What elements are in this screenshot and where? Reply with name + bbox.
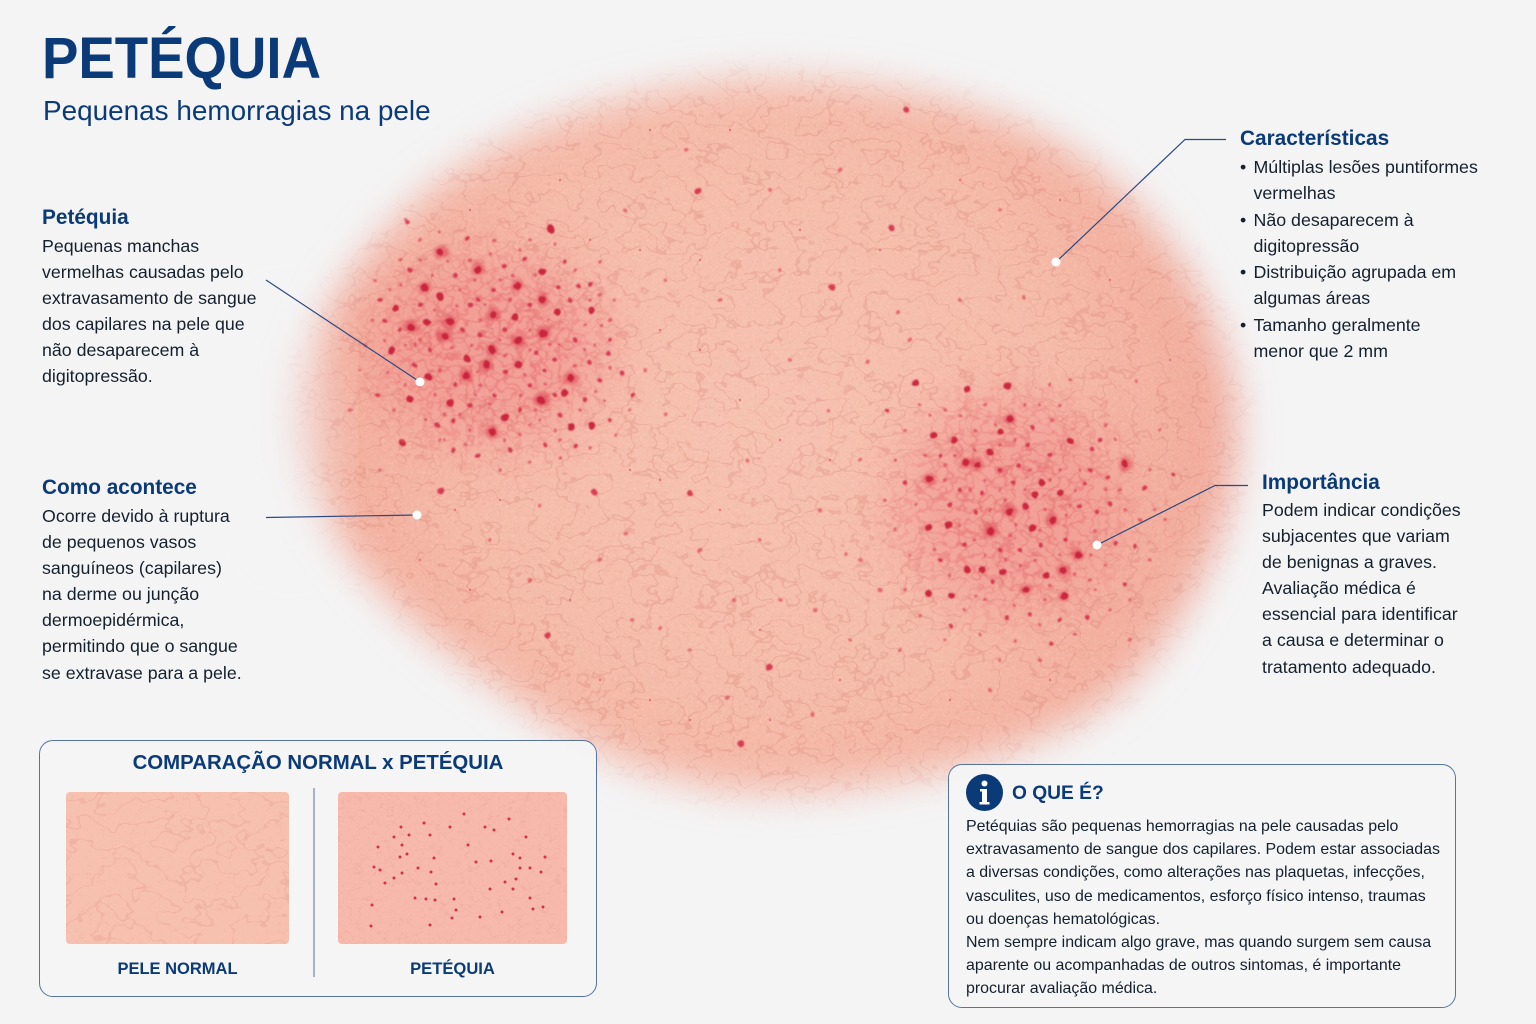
panel: Petéquia [42,206,257,386]
text: Importância description: subjacentes que variam [1262,526,1450,546]
scattered petechiae [350,110,1170,744]
text: Importância description: tratamento adequado. [1262,657,1436,677]
subtitle: Pequenas hemorragias na pele [43,95,431,126]
comparison images and divider [66,788,567,977]
text: definition: Nem sempre indicam algo grave, mas quando surgem sem causa [966,934,1431,951]
heading: O que é: O QUE É? [1012,783,1104,804]
list: Características: digitopressão [1254,236,1359,256]
list: Características: algumas áreas [1254,288,1370,308]
text: Petéquia description: extravasamento de sangue [42,288,257,308]
label: pele normal: PELE NORMAL [117,960,238,978]
text: Como acontece description: se extravase para a pele. [42,663,242,683]
text: definition: extravasamento de sangue dos capilares. Podem estar associadas [966,841,1440,858]
text: definition: a diversas condições, como alterações nas plaquetas, infecções, [966,864,1425,881]
text: definition: ou doenças hematológicas. [966,911,1160,928]
panel: Importância [1262,471,1461,677]
text: Importância description: de benignas a graves. [1262,552,1437,572]
label: petéquia: PETÉQUIA [410,959,495,978]
heading: Características: Características [1240,127,1389,150]
text: Como acontece description: sanguíneos (capilares) [42,558,222,578]
text: definition: vasculites, uso de medicamentos, esforço físico intenso, traumas [966,888,1426,905]
text: Como acontece description: Ocorre devido à ruptura [42,506,230,526]
left edge fade [252,300,328,560]
skin illustration with petechiae clusters [266,52,1264,819]
list: Características: menor que 2 mm [1254,341,1388,361]
text: Importância description: Avaliação médica é [1262,578,1416,598]
cluster vessel network [361,230,1140,632]
list: Características: Distribuição agrupada em [1254,262,1456,282]
text: Petéquia description: Pequenas manchas [42,236,199,256]
text: Como acontece description: dermoepidérmica, [42,610,184,630]
normal skin sample [66,792,289,944]
list: Características [1240,157,1478,361]
text: Petéquia description: digitopressão. [42,366,153,386]
text: Importância description: Podem indicar condições [1262,500,1461,520]
right cluster redness [900,400,1120,610]
icon: info [966,774,1003,811]
skin patch [274,52,1264,819]
comparison heading: COMPARAÇÃO NORMAL x PETÉQUIA [133,752,503,774]
panel: Como acontece [42,476,242,683]
text: Como acontece description [42,506,242,683]
right cluster petechiae [885,380,1173,660]
list: Características: Múltiplas lesões puntiformes [1254,157,1478,177]
panel: Características [1240,127,1478,361]
text: Importância description: a causa e determinar o [1262,630,1444,650]
list: Características: • [1240,262,1246,282]
heading: Petéquia: Petéquia [42,206,129,229]
text: Petéquia description: dos capilares na pele que [42,314,245,334]
text: Importância description [1262,500,1461,677]
text: Petéquia description [42,236,257,386]
text: Como acontece description: permitindo que o sangue [42,636,238,656]
title: PETÉQUIA [42,26,321,91]
text: Como acontece description: de pequenos vasos [42,532,196,552]
list: Características: Tamanho geralmente [1254,315,1421,335]
text: Petéquia description: vermelhas causadas pelo [42,262,244,282]
leader lines [266,140,1248,545]
left cluster redness [375,255,605,445]
list: Características: Não desaparecem à [1254,210,1414,230]
petechia skin sample [338,792,567,944]
text: Como acontece description: na derme ou junção [42,584,199,604]
list: Características: • [1240,157,1246,177]
list: Características: • [1240,315,1246,335]
list: Características: vermelhas [1254,183,1336,203]
text: definition: Petéquias são pequenas hemorragias na pele causadas pelo [966,818,1398,835]
list: Características: • [1240,210,1246,230]
leader dots [412,258,1102,550]
heading: Como acontece: Como acontece [42,476,197,499]
text: definition [966,818,1440,997]
comparison divider [313,788,315,977]
panel: comparison normal vs petechia [39,740,597,997]
panel: O que é [948,764,1456,1008]
left cluster petechiae [360,222,632,470]
text: Importância description: essencial para identificar [1262,604,1458,624]
text: Petéquia description: não desaparecem à [42,340,199,360]
text: definition: procurar avaliação médica. [966,980,1157,997]
text: definition: aparente ou acompanhadas de outros sintomas, é importante [966,957,1401,974]
heading: Importância: Importância [1262,471,1380,494]
